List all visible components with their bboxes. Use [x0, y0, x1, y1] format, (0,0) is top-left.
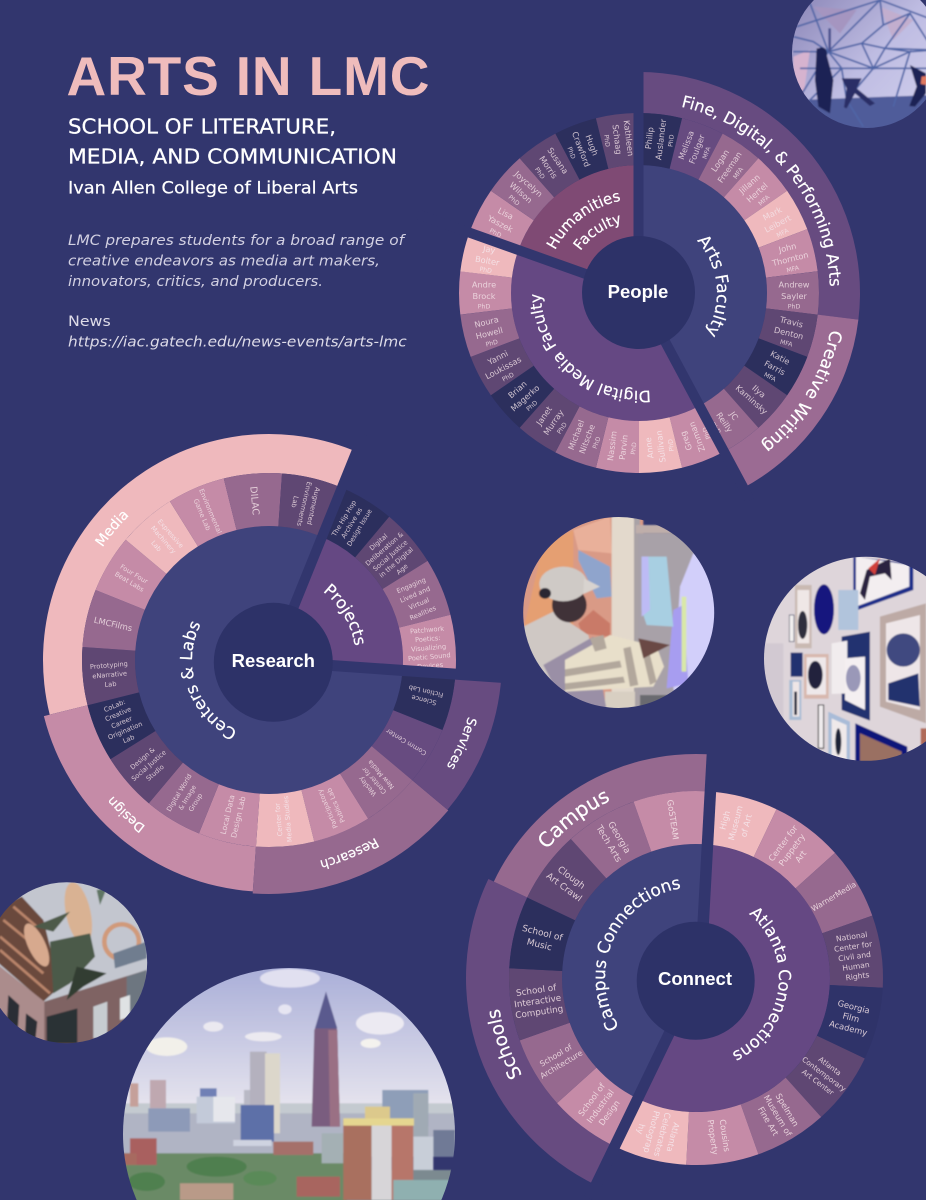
- cell: School of Industrial Design: [551, 1059, 643, 1147]
- cell: GoSTEAM: GoSTEAM: [665, 799, 681, 840]
- cell: Georgia Film Academy: [816, 984, 883, 1059]
- cell: Yanni Loukissas: Loukissas: [483, 354, 523, 381]
- outer ring: Campus: [494, 695, 721, 947]
- cell: Jay Bolter: PhD: [479, 266, 493, 275]
- divider gaps between People sectors: [418, 58, 750, 500]
- cell: John Thornton: [755, 229, 823, 289]
- cell: Andrew Sayler: Andrew: [779, 280, 810, 290]
- cell: National Center for Civil and Human Rights: Civil and: [838, 950, 872, 963]
- cell: Spelman Museum of Fine Art: Fine Art: [756, 1105, 781, 1138]
- cell: Expressive Machinery Lab: Lab: [149, 539, 163, 553]
- cell: Anne Sullivan: PhD: [667, 438, 676, 452]
- cell: Wesley Center for New Media: [329, 742, 412, 824]
- news link: [68, 314, 407, 351]
- cell: Brian Magerko: [487, 357, 557, 428]
- cell: Michael Nitsche: PhD: [592, 436, 603, 450]
- cell: The Hip Hop Archive as Design Issue: The Hip Hop: [330, 499, 358, 539]
- cell: Environmental Game Lab: [170, 471, 250, 552]
- cell: CoLab: Creative Career Origination Lab: [80, 679, 161, 759]
- cell: Travis Denton: MFA: [779, 339, 794, 349]
- intro paragraph: LMC prepares students for a broad range of: [68, 233, 406, 249]
- cell: JC Reilly: [689, 386, 758, 456]
- cell: Environmental Game Lab: Environmental: [197, 488, 223, 535]
- label: Research ring: Research: [320, 838, 380, 870]
- cell: Michael Nitsche: Nitsche: [577, 423, 597, 455]
- cell: Melissa Foulger: MFA: [702, 145, 713, 160]
- ring: Centers & Labs: [126, 517, 412, 803]
- cell: National Center for Civil and Human Rights: [813, 916, 896, 1004]
- outer ring: Creative Writing: [719, 305, 858, 500]
- cell: School of Interactive Computing: Interactive: [514, 994, 562, 1010]
- label: Media: Media: [94, 512, 128, 546]
- cell: CoLab: Creative Career Origination Lab: Origination: [107, 720, 144, 742]
- cell: Joycelyn Wilson: PhD: [507, 194, 521, 208]
- cell: Comm Center: Comm Center: [384, 727, 428, 757]
- cell: Local Data Design Lab: Local Data: [219, 794, 237, 835]
- cell: Nassim Parvin: [596, 417, 640, 473]
- cell: Lisa Yaszek: PhD: [488, 227, 503, 239]
- cell: Engaging Lived and Virtual Realities: Virtual: [408, 596, 431, 612]
- cell: High Museum of Art: High: [718, 810, 732, 831]
- cell: Clough Art Crawl: Clough: [555, 865, 586, 892]
- cell: Wesley Center for New Media: New Media: [366, 758, 396, 791]
- cell: Jay Bolter: Bolter: [474, 254, 501, 268]
- outer ring: Schools: [389, 879, 696, 1186]
- cell: John Thornton: Thornton: [770, 250, 809, 268]
- cell: Michael Nitsche: [554, 403, 609, 468]
- cell: LMCFilms: LMCFilms: [93, 615, 133, 633]
- cell: Travis Denton: Travis: [778, 314, 804, 330]
- cell: School of Architecture: [509, 1008, 604, 1103]
- cell: Georgia Tech Arts: Tech Arts: [593, 823, 623, 865]
- cell: Participatory Publics Lab: [288, 768, 368, 849]
- cell: Philip Auslander: [639, 113, 682, 169]
- label: Design: Design: [109, 796, 145, 833]
- cell: Patchwork Poetics: Poetic Sound: [408, 651, 451, 663]
- cell: Hugh Crawford: Hugh: [583, 133, 601, 157]
- chart: Connect sunburst: [466, 754, 883, 1182]
- cell: Design & Social Justice Studio: Social Justice: [130, 748, 168, 783]
- cell: Melissa Foulger: Foulger: [687, 133, 707, 165]
- photo: man at interactive wall: [523, 517, 714, 708]
- cell: Georgia Film Academy: Film: [842, 1010, 861, 1024]
- cell: CoLab: Creative Career Origination Lab: Lab: [122, 733, 136, 745]
- cell: Spelman Museum of Fine Art: Spelman: [774, 1092, 801, 1128]
- cell: Digital Deliberation & Social Justice in the Digital Age: Deliberation &: [364, 530, 405, 568]
- cell: Katie Farris: Katie: [769, 348, 792, 367]
- cell: Noura Howell: Noura: [473, 314, 500, 330]
- cell: National Center for Civil and Human Rights: Human: [842, 960, 870, 973]
- cell: Four Four Beat Labs: Beat Labs: [113, 570, 146, 594]
- cell: Anne Sullivan: Anne: [643, 437, 655, 459]
- cell: Georgia Tech Arts: [571, 791, 666, 886]
- label: Projects: Projects: [324, 583, 364, 646]
- cell: Katie Farris: Farris: [763, 358, 787, 377]
- cell: Design & Social Justice Studio: [105, 720, 187, 803]
- news link: News: [68, 314, 111, 330]
- cell: Spelman Museum of Fine Art: [726, 1070, 821, 1165]
- cell: Brian Magerko: PhD: [525, 399, 539, 413]
- cell: Lisa Yaszek: [471, 189, 538, 249]
- label: Campus Connections: Campus Connections: [596, 879, 680, 1030]
- cell: Clough Art Crawl: Art Crawl: [544, 871, 583, 904]
- cell: LMCFilms: [82, 589, 146, 651]
- photo: dancers in geodesic dome: [792, 0, 926, 128]
- cell: Nassim Parvin: PhD: [630, 442, 638, 455]
- subtitle: school name: SCHOOL OF LITERATURE,: [68, 114, 336, 138]
- cell: CoLab: Creative Career Origination Lab: Career: [110, 714, 134, 731]
- cell: Susana Morris: [520, 130, 589, 200]
- cell: Philip Auslander: Auslander: [653, 118, 668, 161]
- cell: Ilya Kaminsky: Ilya: [750, 383, 768, 400]
- cell: Cousins Property: [670, 1095, 758, 1178]
- cell: Jillann Hertel: MFA: [757, 193, 772, 207]
- cell: Atlanta Contemporary Art Center: Contemporary: [800, 1055, 848, 1094]
- cell: Brian Magerko: Magerko: [509, 383, 541, 413]
- label: Arts Faculty: Arts Faculty: [697, 236, 729, 338]
- cell: Expressive Machinery Lab: Machinery: [149, 524, 178, 556]
- ring: Projects: [269, 536, 437, 708]
- cell: Brian Magerko: Brian: [506, 379, 529, 400]
- divider gaps between Research sectors: [272, 434, 516, 678]
- cell: Engaging Lived and Virtual Realities: Engaging: [395, 576, 427, 595]
- cell: School of Industrial Design: Industrial: [585, 1087, 616, 1125]
- cell: Engaging Lived and Virtual Realities: [377, 561, 458, 641]
- cell: Prototyping eNarrative Lab: Prototyping: [90, 660, 128, 671]
- cell: Center for Media Studies: Media Studies: [282, 795, 294, 842]
- cell: Melissa Foulger: [669, 118, 724, 183]
- cell: Augmented Environments Lab: Lab: [290, 495, 300, 508]
- cell: Ilya Kaminsky: [717, 364, 787, 431]
- cell: WarnerMedia: WarnerMedia: [810, 880, 858, 913]
- cell: Georgia Tech Arts: Georgia: [605, 820, 632, 856]
- cell: Andre Brock: [455, 265, 516, 315]
- cell: Atlanta Contemporary Art Center: [777, 1031, 865, 1123]
- cell: Andrew Sayler: Sayler: [781, 291, 807, 301]
- intro paragraph: creative endeavors as media art makers,: [68, 254, 380, 270]
- cell: Janet Murray: [517, 383, 581, 452]
- cell: Spelman Museum of Fine Art: Museum of: [762, 1093, 794, 1139]
- cell: Center for Puppetry Art: Center for: [766, 823, 800, 863]
- cell: School of Interactive Computing: Computing: [515, 1004, 564, 1021]
- cell: Engaging Lived and Virtual Realities: Lived and: [399, 585, 431, 605]
- cell: Digital Deliberation & Social Justice in the Digital Age: Social Justice: [371, 539, 409, 573]
- outer ring: Research: [232, 731, 448, 955]
- cell: Mark Leibert: Leibert: [763, 212, 793, 235]
- cell: Jay Bolter: Jay: [481, 243, 496, 255]
- cell: Janet Murray: PhD: [556, 421, 569, 436]
- ring: Humanities Faculty: [519, 136, 681, 293]
- cell: Katie Farris: [740, 337, 807, 397]
- cell: School of Industrial Design: School of: [576, 1080, 608, 1118]
- cell: Local Data Design Lab: [198, 783, 260, 847]
- cell: Noura Howell: [455, 297, 523, 357]
- label: Services: Services: [447, 717, 477, 770]
- cell: Environmental Game Lab: Game Lab: [192, 498, 212, 532]
- cell: Expressive Machinery Lab: [126, 496, 209, 578]
- cell: Participatory Publics Lab: Participatory: [316, 788, 340, 830]
- cell: Susana Morris: Morris: [537, 154, 560, 180]
- cell: Joycelyn Wilson: Wilson: [508, 180, 534, 205]
- cell: Travis Denton: [757, 308, 818, 357]
- label: Research hub: Research: [232, 650, 315, 671]
- cell: Melissa Foulger: Melissa: [676, 129, 696, 161]
- cell: The Hip Hop Archive as Design Issue: [317, 487, 393, 563]
- cell: Atlanta Celebrates Photography: hy: [635, 1123, 647, 1135]
- cell: High Museum of Art: Museum: [726, 804, 745, 841]
- cell: Atlanta Celebrates Photography: Celebrates: [652, 1111, 673, 1158]
- outer ring: Media: [0, 409, 398, 715]
- cell: Participatory Publics Lab: Publics Lab: [325, 787, 347, 824]
- cell: Jillann Hertel: Hertel: [744, 180, 770, 205]
- cell: School of Music: [509, 897, 576, 972]
- subtitle: college name: Ivan Allen College of Liberal Arts: [68, 178, 358, 197]
- cell: Greg Zinman: [659, 403, 723, 472]
- cell: Digital Deliberation & Social Justice in the Digital Age: Digital: [368, 532, 389, 552]
- cell: Prototyping eNarrative Lab: [74, 635, 145, 705]
- cell: Augmented Environments Lab: Augmented: [305, 486, 321, 526]
- cell: Michael Nitsche: Michael: [566, 418, 586, 451]
- cell: Kathleen Schaag: PhD: [602, 134, 611, 148]
- cell: Atlanta Celebrates Photography: [615, 1098, 690, 1165]
- cell: Logan Freeman: MFA: [732, 166, 745, 181]
- cell: Anne Sullivan: Sullivan: [654, 430, 668, 463]
- cell: Digital World & Image Group: Digital World: [165, 773, 194, 813]
- ring: Atlanta Connections: [638, 841, 837, 1119]
- outer ring: Services: [410, 671, 501, 813]
- cell: Georgia Film Academy: Academy: [828, 1018, 868, 1038]
- cell: Yanni Loukissas: Yanni: [485, 348, 510, 367]
- cell: Wesley Center for New Media: Center for: [360, 765, 388, 796]
- cell: John Thornton: MFA: [786, 264, 801, 274]
- cell: Clough Art Crawl: [527, 833, 615, 925]
- cell: Hugh Crawford: Crawford: [570, 130, 592, 168]
- label: Fine, Digital, & Performing Arts: Fine, Digital, & Performing Arts: [682, 95, 841, 286]
- cell: Hugh Crawford: PhD: [565, 146, 577, 160]
- cell: Cousins Property: Property: [706, 1119, 721, 1155]
- cell: Center for Media Studies: [244, 784, 314, 855]
- cell: Center for Puppetry Art: Art: [793, 848, 809, 864]
- label: Connect hub: Connect: [658, 968, 732, 989]
- chart: Research sunburst: [43, 434, 501, 894]
- center hub: Connect: [637, 922, 755, 1040]
- cell: Atlanta Celebrates Photography: Atlanta: [665, 1121, 682, 1153]
- cell: Nassim Parvin: Parvin: [617, 434, 630, 460]
- cell: Expressive Machinery Lab: Expressive: [156, 518, 185, 550]
- intro paragraph: [68, 233, 406, 290]
- cell: GoSTEAM: [634, 778, 722, 861]
- cell: Kathleen Schaag: Kathleen: [622, 120, 636, 157]
- cell: Susana Morris: PhD: [533, 166, 546, 181]
- news link: https://iac.gatech.edu/news-events/arts-lmc: [68, 335, 407, 351]
- cell: John Thornton: John: [777, 241, 797, 255]
- cell: Mark Leibert: [741, 191, 812, 258]
- cell: DILAC: [224, 465, 294, 536]
- cell: Katie Farris: MFA: [763, 371, 778, 384]
- cell: Noura Howell: PhD: [485, 339, 499, 349]
- cell: Ilya Kaminsky: Kaminsky: [734, 383, 770, 416]
- cell: Engaging Lived and Virtual Realities: Realities: [408, 604, 438, 622]
- cell: Science Fiction Lab: Fiction Lab: [408, 683, 444, 699]
- cell: Jillann Hertel: [721, 158, 791, 229]
- cell: Anne Sullivan: [627, 414, 682, 478]
- ring: Arts Faculty: [639, 165, 767, 406]
- chart: People sunburst: [459, 72, 860, 486]
- photo: gallery wall: [760, 553, 926, 767]
- cell: Kathleen Schaag: Schaag: [611, 124, 624, 155]
- cell: Digital World & Image Group: & Image: [177, 784, 198, 812]
- cell: JC Reilly: Reilly: [714, 410, 735, 434]
- cell: High Museum of Art: [702, 791, 777, 858]
- cell: Patchwork Poetics: Visualizing: [411, 643, 446, 654]
- intro paragraph: innovators, critics, and producers.: [68, 274, 323, 290]
- cell: DILAC: DILAC: [247, 486, 261, 516]
- cell: The Hip Hop Archive as Design Issue: Archive as: [340, 506, 364, 540]
- label: Atlanta Connections: Atlanta Connections: [733, 908, 792, 1060]
- cell: Philip Auslander: Philip: [643, 127, 656, 150]
- cell: Logan Freeman: Logan: [709, 148, 731, 174]
- cell: Four Four Beat Labs: [96, 536, 172, 612]
- cell: Cousins Property: Cousins: [718, 1119, 732, 1152]
- cell: CoLab: Creative Career Origination Lab: CoLab:: [103, 698, 127, 714]
- cell: National Center for Civil and Human Rights: Rights: [845, 970, 870, 982]
- cell: Atlanta Contemporary Art Center: Atlanta: [817, 1055, 843, 1078]
- cell: Philip Auslander: PhD: [667, 134, 676, 147]
- cell: Travis Denton: Denton: [773, 325, 805, 341]
- cell: Nassim Parvin: Nassim: [605, 430, 619, 461]
- cell: Design & Social Justice Studio: Design &: [129, 746, 157, 771]
- cell: Jay Bolter: [460, 229, 521, 278]
- cell: School of Architecture: Architecture: [538, 1048, 584, 1081]
- cell: Jillann Hertel: Jillann: [736, 172, 762, 196]
- ring: Campus Connections: [517, 809, 749, 1099]
- cell: Digital Deliberation & Social Justice in the Digital Age: in the Digital: [378, 546, 415, 580]
- cell: The Hip Hop Archive as Design Issue: Design Issue: [345, 508, 374, 548]
- cell: Greg Zinman: PhD: [701, 426, 713, 440]
- cell: National Center for Civil and Human Rights: Center for: [833, 939, 874, 954]
- cell: Andrew Sayler: [762, 271, 823, 321]
- label: Creative Writing: Creative Writing: [762, 332, 842, 452]
- cell: Patchwork Poetics: [393, 615, 464, 685]
- cell: Yanni Loukissas: PhD: [501, 371, 516, 383]
- outer ring: Fine, Digital, & Performing Arts: [639, 72, 860, 320]
- cell: Center for Puppetry Art: [749, 809, 841, 897]
- cell: Mark Leibert: Mark: [761, 204, 784, 223]
- cell: Wesley Center for New Media: Wesley: [357, 775, 378, 798]
- cell: Andrew Sayler: PhD: [788, 304, 800, 310]
- cell: Center for Media Studies: Center for: [273, 802, 284, 837]
- cell: School of Music: Music: [526, 937, 553, 953]
- label: Schools: Schools: [488, 1010, 522, 1080]
- cell: Lisa Yaszek: Lisa: [496, 205, 515, 222]
- cell: Atlanta Contemporary Art Center: Art Center: [800, 1067, 836, 1097]
- cell: Digital Deliberation & Social Justice in the Digital Age: Age: [395, 562, 410, 577]
- cell: Noura Howell: Howell: [475, 325, 504, 341]
- cell: School of Interactive Computing: School of: [515, 983, 558, 999]
- photo: Atlanta skyline: [120, 967, 457, 1200]
- cell: Joycelyn Wilson: Joycelyn: [512, 168, 545, 199]
- subtitle: school name: [68, 114, 397, 168]
- cell: Science Fiction Lab: [392, 669, 456, 731]
- cell: Susana Morris: Susana: [545, 145, 571, 176]
- cell: Logan Freeman: [697, 134, 761, 203]
- cell: Greg Zinman: Zinman: [687, 420, 707, 453]
- cell: Joycelyn Wilson: [491, 155, 561, 222]
- cell: Kathleen Schaag: [596, 108, 651, 172]
- cell: Prototyping eNarrative Lab: Lab: [104, 680, 117, 689]
- cell: Andre Brock: Andre: [472, 280, 496, 290]
- label: Humanities: Humanities: [546, 193, 620, 250]
- cell: Center for Puppetry Art: Puppetry: [776, 832, 807, 868]
- cell: School of Architecture: School of: [538, 1042, 574, 1069]
- center hub: Research: [214, 603, 333, 722]
- ring: Digital Media Faculty: [481, 208, 698, 466]
- cell: School of Music: School of: [521, 924, 564, 944]
- cell: Yanni Loukissas: [466, 328, 537, 395]
- cell: Mark Leibert: MFA: [776, 227, 791, 239]
- divider gaps between Connect sectors: [589, 738, 713, 1199]
- cell: JC Reilly: PhD: [709, 421, 722, 436]
- cell: Science Fiction Lab: Science: [411, 693, 437, 707]
- cell: JC Reilly: JC: [727, 409, 741, 422]
- cell: Augmented Environments Lab: [278, 473, 340, 537]
- label: Campus: Campus: [539, 792, 609, 846]
- subtitle: school name: MEDIA, AND COMMUNICATION: [68, 144, 397, 168]
- cell: Comm Center: [366, 708, 442, 784]
- cell: School of Industrial Design: Design: [596, 1098, 622, 1127]
- cell: WarnerMedia: [788, 853, 883, 948]
- cell: Augmented Environments Lab: Environments: [295, 481, 313, 528]
- cell: Georgia Film Academy: Georgia: [837, 998, 871, 1016]
- cell: Lisa Yaszek: Yaszek: [485, 212, 515, 235]
- cell: Patchwork Poetics: Patchwork: [410, 625, 444, 636]
- cell: Four Four Beat Labs: Four Four: [119, 563, 150, 586]
- cell: Andre Brock: PhD: [478, 304, 490, 310]
- cell: School of Interactive Computing: [496, 952, 579, 1040]
- cell: CoLab: Creative Career Origination Lab: Creative: [104, 705, 132, 723]
- cell: Digital World & Image Group: Group: [187, 792, 204, 813]
- cell: Janet Murray: Murray: [541, 407, 566, 437]
- label: Digital Media Faculty: Digital Media Faculty: [530, 294, 650, 403]
- outer ring: Design: [33, 702, 265, 891]
- cell: Andre Brock: Brock: [472, 291, 496, 301]
- center hub: People: [582, 236, 695, 349]
- title: ARTS IN LMC: [66, 45, 430, 107]
- cell: Patchwork Poetics: Devices: [417, 661, 444, 671]
- cell: Patchwork Poetics: Poetics:: [415, 634, 441, 644]
- cell: Prototyping eNarrative Lab: eNarrative: [92, 669, 127, 680]
- cell: Local Data Design Lab: Design Lab: [229, 795, 248, 839]
- label: Centers & Labs: Centers & Labs: [180, 621, 235, 739]
- label: Faculty: Faculty: [572, 215, 620, 250]
- label: People: People: [608, 281, 668, 302]
- cell: Digital World & Image Group: [145, 757, 221, 833]
- cell: Digital Deliberation & Social Justice in the Digital Age: [351, 517, 433, 600]
- cell: Logan Freeman: Freeman: [715, 150, 744, 185]
- cell: Design & Social Justice Studio: Studio: [145, 763, 166, 783]
- cell: Atlanta Celebrates Photography: Photograp: [642, 1110, 662, 1154]
- cell: Greg Zinman: Greg: [678, 430, 694, 452]
- cell: Hugh Crawford: [555, 114, 619, 183]
- cell: Janet Murray: Janet: [533, 404, 554, 428]
- cell: National Center for Civil and Human Rights: National: [835, 930, 868, 943]
- photo: lily mural on brick building: [0, 880, 150, 1047]
- cell: High Museum of Art: of Art: [738, 812, 754, 838]
